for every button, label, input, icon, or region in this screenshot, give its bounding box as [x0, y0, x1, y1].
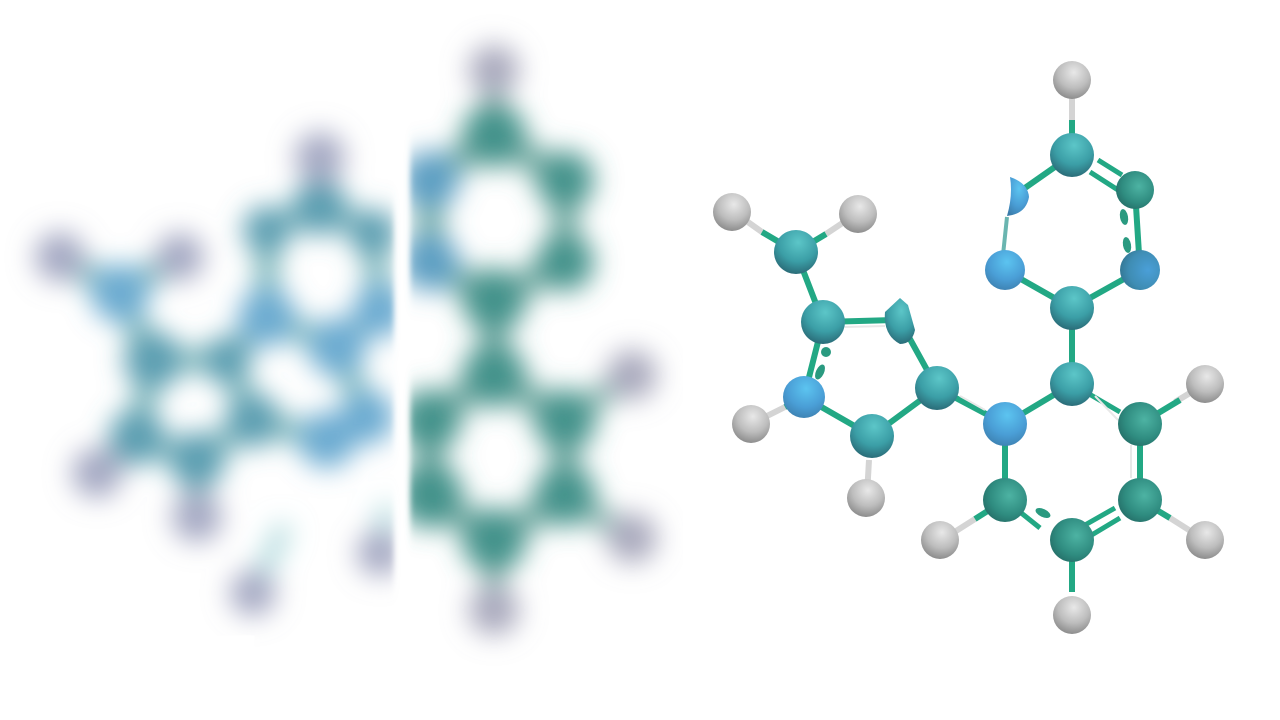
N-N fragment bond [1003, 217, 1007, 255]
hydrogen bonds, grey portions [738, 95, 1200, 538]
dashed bond fragments [813, 208, 1132, 520]
blurred near molecule (centre) [397, 45, 657, 635]
carbon atoms [774, 133, 1094, 458]
bonds [762, 120, 1180, 592]
white bond highlights [845, 326, 1131, 478]
atom: partial nitrogen [1007, 177, 1029, 216]
green carbon atoms [983, 171, 1162, 562]
hydrogen atoms [713, 61, 1224, 634]
atom: partial carbon [885, 298, 915, 344]
blurred far molecule (left) [35, 132, 407, 616]
nitrogen atoms [783, 250, 1160, 446]
sharp molecule (right) [713, 61, 1224, 634]
